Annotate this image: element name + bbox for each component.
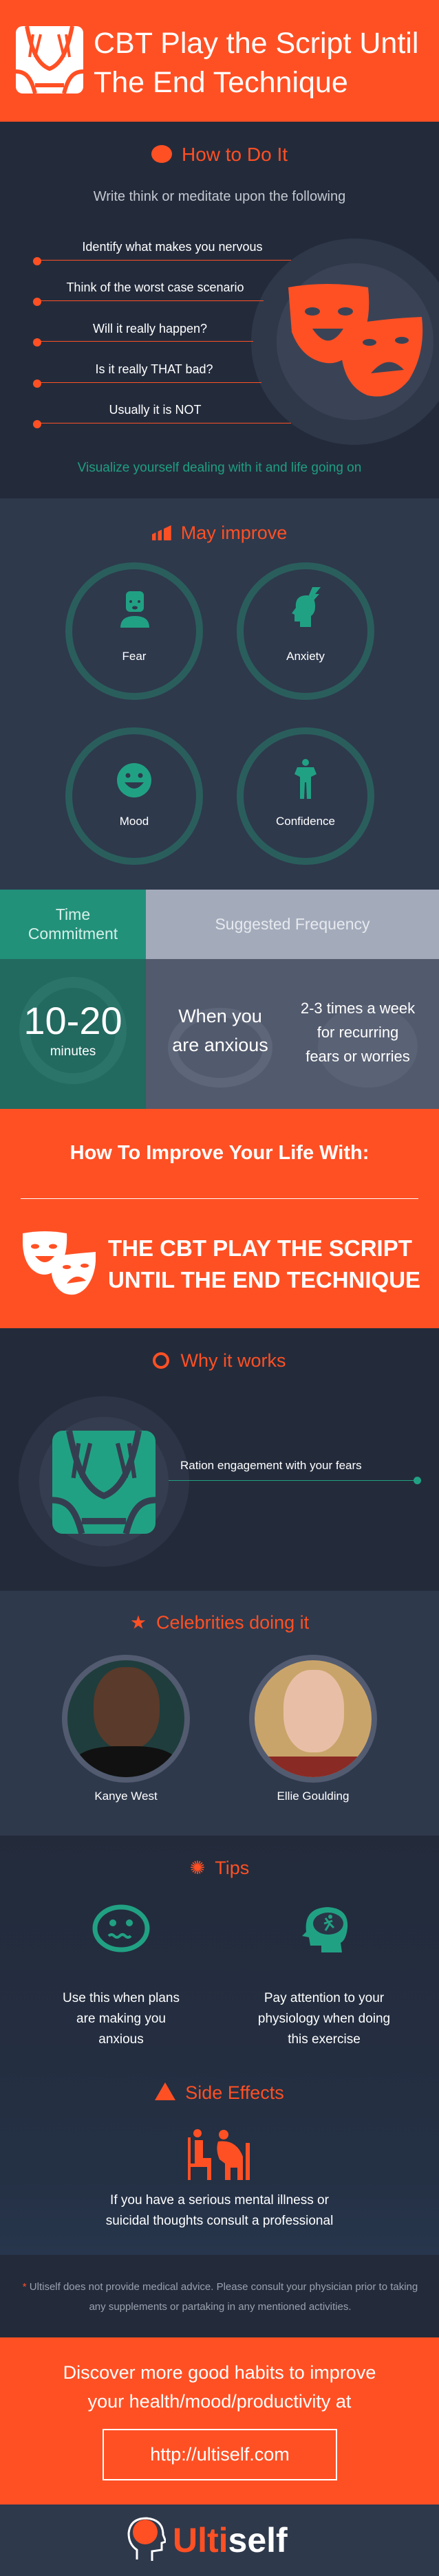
value: 10-20 minutes: 10-20	[23, 999, 122, 1042]
header: suggested frequency: Suggested Frequency	[215, 915, 370, 933]
banner title	[108, 1235, 420, 1292]
cta text: Discover more good habits to improve	[63, 2362, 376, 2383]
frequency: 2-3 times a week	[301, 1000, 416, 1065]
header: time commitment	[0, 890, 146, 959]
icon: theater curtain	[16, 26, 83, 93]
frequency: when anxious: are anxious	[172, 1035, 268, 1055]
tip 2: physiology when doing	[258, 2012, 390, 2026]
logo: ultiself: Ultiself	[173, 2521, 288, 2560]
circle: anxiety: Anxiety	[286, 650, 325, 663]
banner title: UNTIL THE END TECHNIQUE	[108, 1267, 420, 1292]
step 4: Is it really THAT bad?	[95, 362, 213, 376]
banner: how to improve	[0, 1109, 439, 1328]
heading: may improve: May improve	[181, 522, 287, 543]
panel: tips and side effects	[0, 1836, 439, 2255]
panel: may improve	[0, 498, 439, 890]
step 3: Will it really happen?	[93, 322, 207, 335]
value: 10-20 minutes	[19, 977, 127, 1084]
heading: celebrities: ★ Celebrities doing it	[130, 1612, 309, 1633]
frequency: 2-3 times a week: fears or worries	[306, 1048, 410, 1065]
circle: fear	[65, 562, 203, 700]
frequency: when anxious: When you	[178, 1006, 262, 1026]
tip 1: are making you	[76, 2012, 166, 2026]
panel: time commitment	[0, 890, 146, 1109]
circle: anxiety	[237, 562, 374, 700]
list of steps	[33, 240, 291, 428]
header: time commitment: Commitment	[28, 925, 118, 943]
step 1: Identify what makes you nervous	[82, 240, 263, 254]
celebrity: ellie goulding	[249, 1655, 377, 1803]
tip 2: Pay attention to your	[264, 1991, 384, 2005]
celebrity: kanye west	[62, 1655, 190, 1803]
circle: fear: Fear	[122, 650, 146, 663]
disclaimer	[0, 2255, 439, 2337]
panel: why it works	[0, 1328, 439, 1591]
frequency: when anxious	[172, 1006, 268, 1055]
tip 2	[258, 1907, 390, 2047]
icon circle: curtain	[19, 1396, 189, 1567]
step 2: Think of the worst case scenario	[66, 280, 244, 294]
step 2	[33, 280, 264, 306]
panel: how to do it	[0, 122, 439, 498]
call to action	[0, 2337, 439, 2505]
banner heading: How To Improve Your Life With:	[70, 1142, 369, 1164]
circle: confidence: Confidence	[276, 815, 335, 828]
step 5: Usually it is NOT	[109, 403, 201, 417]
side effect text	[106, 2193, 333, 2228]
circle: mood: Mood	[120, 815, 149, 828]
footer	[0, 2505, 439, 2576]
celebrity: kanye west: Kanye West	[94, 1790, 158, 1803]
header: suggested frequency	[146, 890, 439, 959]
tip 1: anxious	[98, 2032, 144, 2047]
tip 1	[63, 1904, 180, 2047]
step 5	[33, 403, 291, 428]
masks circle	[251, 239, 439, 445]
side effect text: suicidal thoughts consult a professional	[106, 2214, 333, 2228]
tip 1: Use this when plans	[63, 1991, 180, 2005]
side effect text: If you have a serious mental illness or	[110, 2193, 329, 2208]
title: CBT Play the Script Until The End Technique	[94, 27, 418, 99]
panel: celebrities	[0, 1591, 439, 1836]
heading: tips: ✺ Tips	[190, 1858, 249, 1878]
step 4	[33, 362, 261, 388]
url button	[103, 2429, 337, 2480]
circle: confidence	[237, 727, 374, 865]
cta text	[63, 2362, 376, 2412]
header: time commitment: Time	[56, 905, 90, 923]
value: 10-20 minutes: minutes	[50, 1044, 96, 1059]
icon: white masks	[23, 1231, 96, 1295]
step 1	[33, 240, 291, 265]
subtitle: Write think or meditate upon the following	[94, 189, 345, 204]
heading: why it works: Why it works	[180, 1350, 286, 1371]
frequency: 2-3 times a week: 2-3 times a week	[301, 1000, 415, 1017]
logo: ultiself	[128, 2518, 288, 2561]
panel: suggested frequency	[146, 890, 439, 1109]
cta text: your health/mood/productivity at	[88, 2391, 351, 2412]
disclaimer: * Ultiself does not provide medical advice. Please consult your physician prior to taking any supplements or partaking in any mentioned activities.	[23, 2281, 418, 2313]
heading: side effects: Side Effects	[185, 2082, 284, 2103]
url button: http://ultiself.com	[150, 2444, 290, 2465]
celebrity: ellie goulding: Ellie Goulding	[277, 1790, 349, 1803]
icon: masks	[288, 284, 422, 397]
step 3	[33, 322, 253, 346]
banner title: THE CBT PLAY THE SCRIPT	[108, 1235, 412, 1261]
icon: therapy session	[188, 2129, 250, 2180]
reason text: Ration engagement with your fears	[180, 1459, 362, 1472]
frequency: 2-3 times a week: for recurring	[317, 1024, 398, 1041]
heading: how to do it: How to Do It	[182, 144, 288, 165]
header band	[0, 0, 439, 122]
circle: mood	[65, 727, 203, 865]
visualize text: Visualize yourself dealing with it and life going on	[78, 461, 361, 475]
tip 2: this exercise	[288, 2032, 361, 2047]
